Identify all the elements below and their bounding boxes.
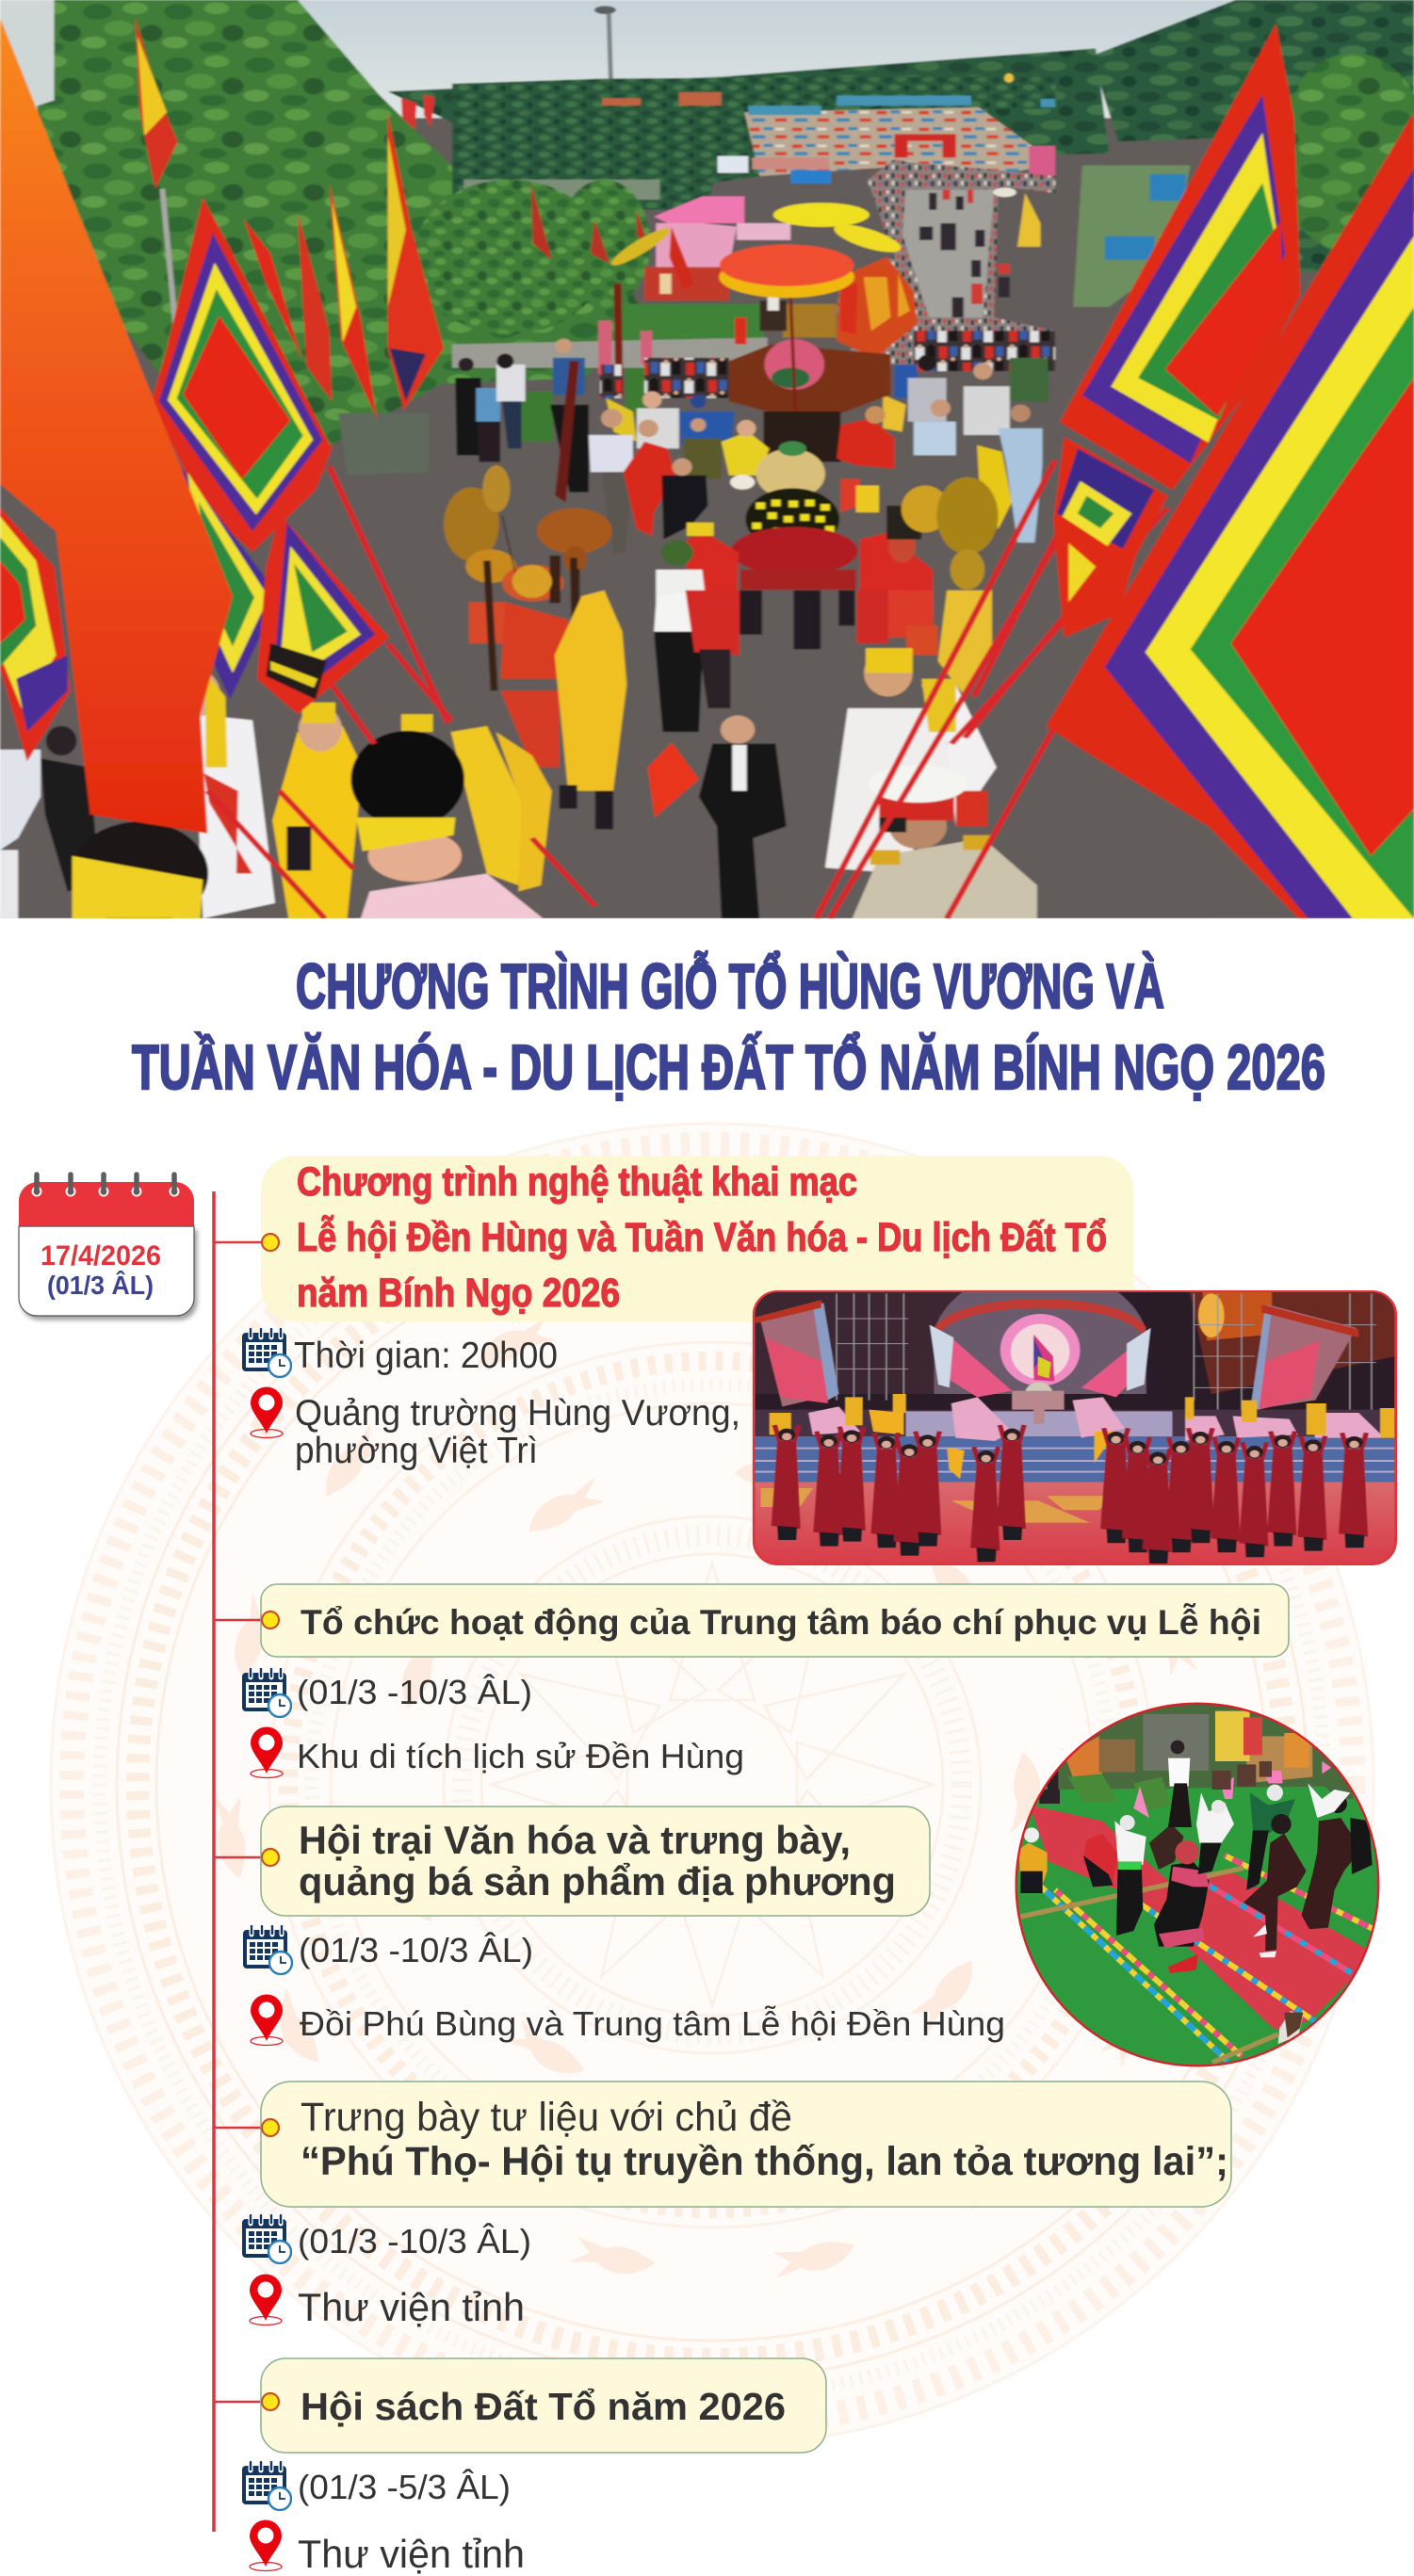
time text: Thời gian: 20h00 [294,1336,558,1376]
location text: Quảng trường Hùng Vương, [295,1393,740,1434]
location text: Khu di tích lịch sử Đền Hùng [297,1737,744,1775]
event 2: press centre [261,1584,1289,1657]
date text: (01/3 -10/3 ÂL) [297,1673,532,1711]
hero photo: Hùng Kings festival procession [0,0,1414,926]
icon: location pin [251,1995,283,2046]
icon: calendar clock [242,1329,291,1377]
date text: (01/3 -10/3 ÂL) [299,1931,533,1969]
icon: calendar clock [242,1669,291,1717]
location text: Thư viện tỉnh [298,2285,525,2329]
location text: Đồi Phú Bùng và Trung tâm Lễ hội Đền Hùng [300,2004,1005,2043]
icon: location pin [251,1727,283,1778]
event 3: cultural camp [261,1806,930,1916]
event 5: book fair [261,2358,826,2453]
event 3: cultural camp: quảng bá sản phẩm địa phương [299,1859,896,1904]
event 2: press centre: Tổ chức hoạt động của Trung tâm báo chí phục vụ Lễ hội [301,1603,1261,1642]
event 5: book fair: Hội sách Đất Tổ năm 2026 [301,2385,786,2428]
calendar badge: date [19,1175,194,1316]
icon: location pin [251,1386,283,1437]
event 3: cultural camp: Hội trại Văn hóa và trưng bày, [299,1818,851,1862]
location text: Thư viện tỉnh [298,2532,525,2576]
event 4: document exhibition: “Phú Thọ- Hội tụ truyền thống, lan tỏa tương lai”; [301,2139,1228,2184]
calendar badge: date: 17/4/2026 [41,1240,161,1272]
icon: calendar clock [243,1926,292,1974]
hero detail: procession centre [414,73,1056,603]
event 4: document exhibition [261,2082,1231,2207]
event 1: opening art programme: Lễ hội Đền Hùng và Tuần Văn hóa - Du lịch Đất Tổ [297,1214,1107,1260]
location text: phường Việt Trì [295,1431,538,1471]
title [132,951,1325,1103]
photo: opening ceremony stage [754,1269,1396,1565]
event 1: opening art programme [261,1156,1133,1321]
event 4: document exhibition: Trưng bày tư liệu với chủ đề [301,2095,792,2140]
photo: bamboo dance circle [1008,1695,1385,2072]
timeline vertical line [214,1191,264,2532]
icon: calendar clock [242,2462,291,2510]
event 1: opening art programme: Chương trình nghệ thuật khai mạc [297,1159,857,1205]
icon: location pin [250,2274,282,2325]
event 1: opening art programme: năm Bính Ngọ 2026 [297,1271,620,1316]
icon: location pin [250,2520,282,2571]
calendar badge: date: (01/3 ÂL) [47,1271,154,1300]
background: bronze drum watermark [51,1124,1373,2446]
date text: (01/3 -5/3 ÂL) [298,2468,511,2506]
date text: (01/3 -10/3 ÂL) [298,2222,531,2260]
icon: calendar clock [242,2215,291,2263]
location text [295,1393,740,1471]
